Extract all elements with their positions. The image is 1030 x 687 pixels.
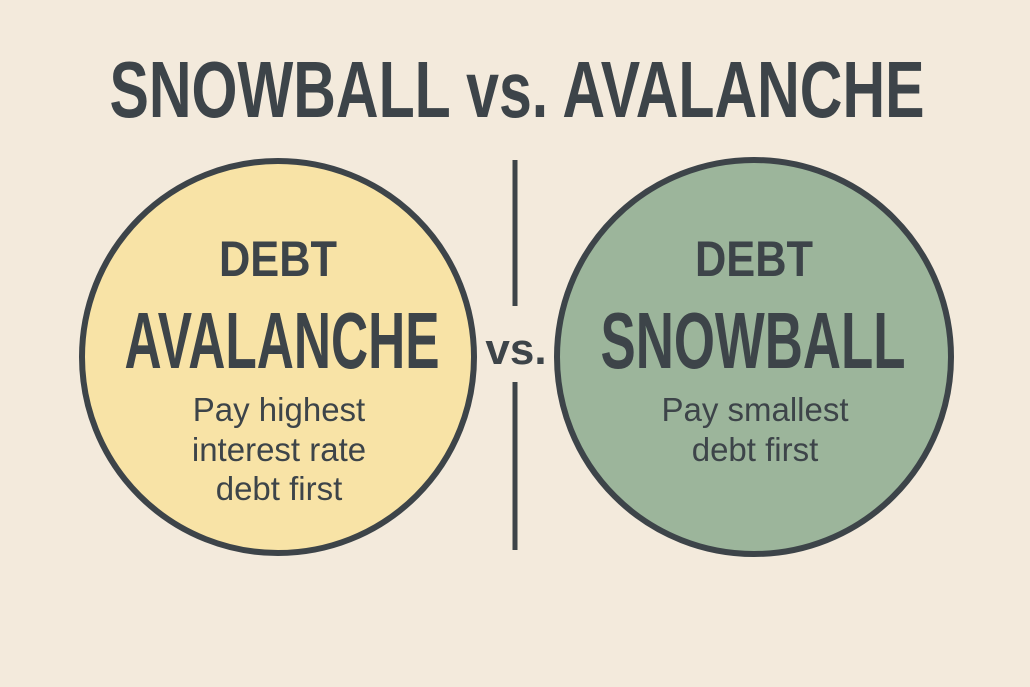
text: avalanche description: Pay highest (193, 391, 365, 428)
text: avalanche description: interest rate (192, 431, 366, 468)
text: snowball description: Pay smallest (661, 391, 849, 428)
heading: debt (left): DEBT (219, 231, 337, 287)
panel: debt snowball (557, 160, 951, 554)
text: snowball description: debt first (692, 431, 818, 468)
heading: debt (right): DEBT (695, 231, 813, 287)
label: vs.: vs. (485, 325, 547, 374)
text: avalanche description: debt first (216, 470, 342, 507)
heading: avalanche: AVALANCHE (124, 296, 440, 385)
panel: debt avalanche (82, 161, 474, 553)
